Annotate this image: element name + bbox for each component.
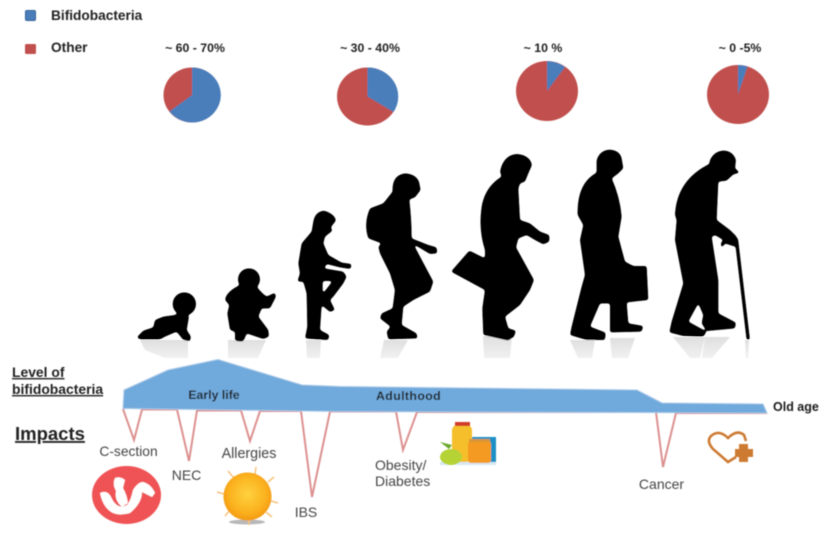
label: Cancer: Cancer [639, 476, 684, 492]
heading: level of bifidobacteria: Level of [12, 364, 65, 380]
silhouette: man with briefcase [451, 154, 549, 341]
label: Obesity/Diabetes [375, 457, 430, 489]
icon: allergen pollen sun [217, 467, 278, 525]
band label: Early life: Early life [188, 388, 240, 402]
legend label: Bifidobacteria: Bifidobacteria [51, 8, 143, 23]
heading: level of bifidobacteria [12, 364, 103, 397]
silhouette: toddler [225, 268, 276, 342]
pie label: ~ 10 % [524, 41, 562, 55]
label: NEC: NEC [172, 467, 201, 483]
icon: C-section [92, 466, 161, 524]
impact line with spikes [123, 409, 767, 497]
band label: Old age: Old age [773, 400, 819, 414]
label: C-section: C-section [99, 444, 158, 459]
silhouette: teen with backpack [366, 173, 437, 339]
heading: level of bifidobacteria: bifidobacteria [12, 381, 103, 397]
pie chart: 0-5% [707, 41, 769, 124]
label: IBS: IBS [295, 504, 317, 520]
bifidobacteria level band [123, 360, 767, 413]
floor reflections [140, 336, 749, 358]
pie label: ~ 30 - 40% [340, 41, 400, 55]
pie chart: 60-70% [164, 41, 225, 122]
label: Obesity/Diabetes: Diabetes [375, 473, 430, 489]
legend swatch: Bifidobacteria [26, 10, 36, 20]
legend [25, 8, 143, 55]
legend label: Other: Other [51, 40, 88, 55]
silhouette: crawling baby [137, 292, 196, 341]
legend swatch: Other [25, 44, 36, 54]
silhouettes: life stages [137, 150, 748, 342]
pie chart: 30-40% [337, 41, 400, 126]
label: Obesity/Diabetes: Obesity/ [375, 457, 426, 473]
icon: heart with plus [709, 433, 753, 462]
silhouette: child [297, 211, 352, 340]
pie label: ~ 0 -5% [719, 41, 761, 55]
pie label: ~ 60 - 70% [165, 41, 225, 55]
silhouette: elderly man with cane [669, 151, 748, 340]
heading: impacts: Impacts [15, 423, 85, 444]
silhouette: older man with case [570, 150, 648, 340]
label: Allergies: Allergies [222, 446, 276, 462]
icon: food jars [440, 422, 496, 465]
pie chart: 10% [516, 41, 578, 121]
band label: Adulthood: Adulthood [376, 389, 441, 403]
